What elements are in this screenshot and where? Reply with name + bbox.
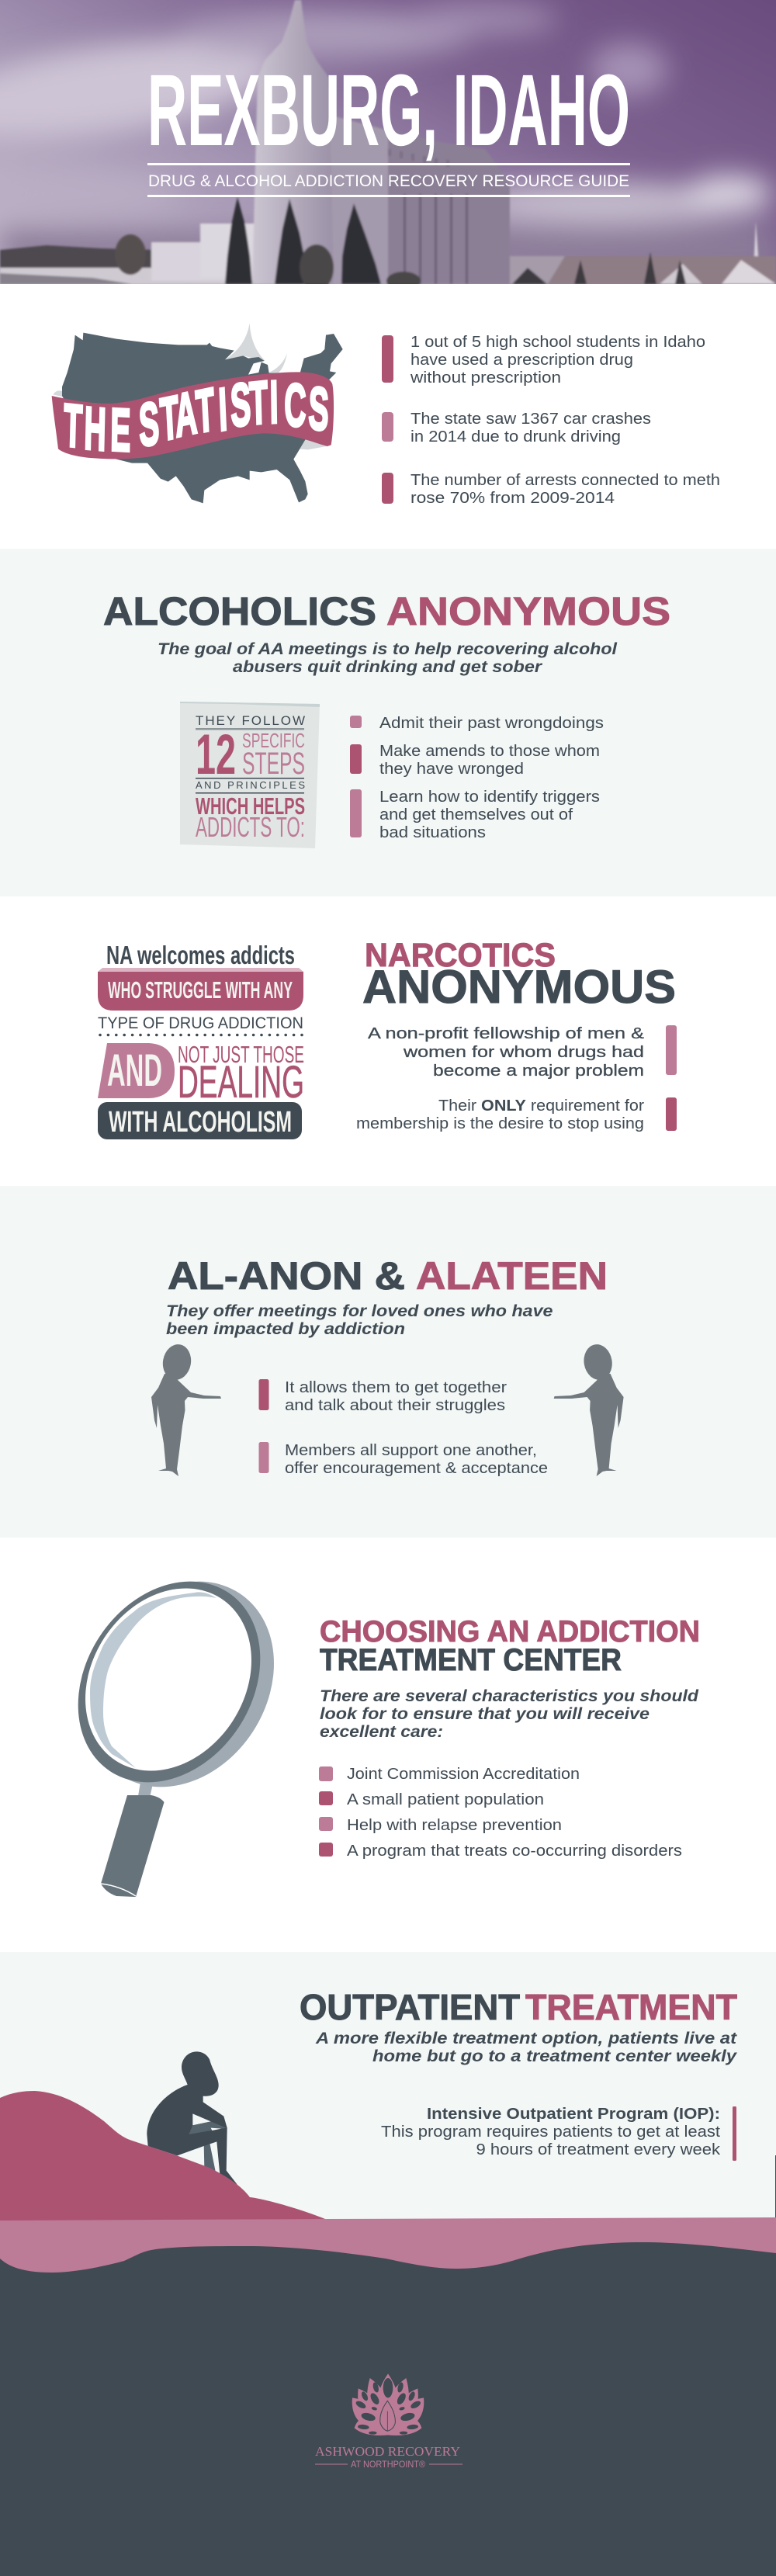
header photo: temple under purple sky	[0, 0, 776, 291]
heading	[362, 937, 676, 1013]
card: 12 steps: WHICH HELPS	[196, 792, 305, 820]
card: 12 steps: ADDICTS TO:	[196, 811, 305, 843]
illustration: seated figure on hill	[0, 2051, 329, 2221]
intro text: look for to ensure that you will receive	[320, 1705, 650, 1723]
text block: requirement	[356, 1097, 677, 1132]
heading	[320, 1615, 700, 1677]
list item 2: they have wronged	[379, 761, 524, 778]
callout: IOP: 9 hours of treatment every week	[476, 2141, 721, 2158]
text block: fellowship: become a major problem	[433, 1063, 644, 1080]
text block: fellowship: women for whom drugs had	[403, 1044, 644, 1061]
card: 12 steps: SPECIFIC	[242, 729, 305, 752]
panel: alcoholics anonymous	[0, 549, 776, 896]
banner text: THE STATISTICS	[63, 369, 330, 465]
card: 12 steps: AND PRINCIPLES	[196, 779, 305, 791]
intro text: The goal of AA meetings is to help recovering alcohol	[158, 640, 618, 658]
stat 1: 1 out of 5 high school students in Idaho	[411, 334, 705, 351]
heading: TREATMENT	[525, 1987, 737, 2027]
heading: ANONYMOUS	[386, 589, 670, 633]
card: 12 steps: STEPS	[242, 747, 305, 781]
heading: ALATEEN	[416, 1254, 608, 1298]
checklist: A program that treats co-occurring disorders	[347, 1843, 682, 1860]
intro text: been impacted by addiction	[166, 1320, 405, 1338]
card: 12 steps: THEY FOLLOW	[196, 713, 305, 728]
text block: fellowship: A non-profit fellowship of men &	[368, 1025, 645, 1042]
typographic block: NA welcomes addicts: NA welcomes addicts	[106, 941, 295, 969]
list item 1	[259, 1379, 507, 1414]
stat 2: The state saw 1367 car crashes	[411, 411, 651, 428]
icon: left figure	[151, 1342, 221, 1476]
stat 3	[382, 472, 720, 507]
text block: requirement: membership is the desire to stop using	[356, 1115, 644, 1132]
heading: OUTPATIENT	[300, 1987, 520, 2027]
intro text	[320, 1687, 699, 1741]
typographic block: NA welcomes addicts	[98, 941, 304, 1139]
panel: the statistics	[52, 324, 720, 507]
heading: ANONYMOUS	[362, 961, 676, 1013]
stat 2: in 2014 due to drunk driving	[411, 428, 621, 446]
panel: footer waves	[0, 2217, 776, 2576]
intro text	[166, 1302, 553, 1338]
intro text: They offer meetings for loved ones who have	[166, 1302, 553, 1320]
list item 2: offer encouragement & acceptance	[285, 1460, 548, 1477]
checklist: A small patient population	[347, 1791, 544, 1808]
logo: Ashwood Recovery: ASHWOOD RECOVERY	[315, 2444, 460, 2459]
icon: US map with banner	[52, 324, 343, 503]
text block: requirement: Their ONLY requirement for	[438, 1097, 644, 1115]
card: 12 steps: 12	[196, 723, 236, 786]
list item 1: Admit their past wrongdoings	[379, 715, 604, 732]
panel: narcotics anonymous	[98, 937, 677, 1139]
stat 3: The number of arrests connected to meth	[411, 472, 720, 489]
callout: IOP	[381, 2106, 736, 2161]
logo: Ashwood Recovery	[315, 2373, 462, 2470]
list item 3: bad situations	[379, 824, 486, 841]
heading: TREATMENT CENTER	[320, 1643, 622, 1677]
stat 2	[382, 411, 651, 446]
list item 1: and talk about their struggles	[285, 1397, 505, 1414]
card: 12 steps	[180, 702, 320, 848]
icon: magnifying glass	[41, 1546, 312, 1897]
typographic block: NA welcomes addicts: AND	[107, 1045, 162, 1096]
subtitle: DRUG & ALCOHOL ADDICTION RECOVERY RESOURCE GUIDE	[148, 172, 629, 190]
heading	[300, 1987, 737, 2027]
panel: header	[0, 0, 776, 291]
intro text	[315, 2030, 737, 2065]
typographic block: NA welcomes addicts: DEALING	[178, 1057, 304, 1108]
intro text: A more flexible treatment option, patients live at	[315, 2030, 737, 2047]
list item 3: Learn how to identify triggers	[379, 789, 600, 806]
list item 2: Make amends to those whom	[379, 743, 600, 760]
intro text: abusers quit drinking and get sober	[233, 658, 543, 676]
intro text: home but go to a treatment center weekly	[372, 2047, 737, 2065]
stat 1: have used a prescription drug	[411, 352, 633, 369]
heading: CHOOSING AN ADDICTION	[320, 1615, 700, 1649]
checklist: Help with relapse prevention	[347, 1817, 562, 1834]
typographic block: NA welcomes addicts: WITH ALCOHOLISM	[109, 1106, 292, 1139]
list item 2	[350, 743, 600, 778]
intro text: excellent care:	[320, 1723, 443, 1741]
typographic block: NA welcomes addicts: WHO STRUGGLE WITH ANY	[108, 976, 293, 1004]
heading	[168, 1254, 608, 1298]
stat 3: rose 70% from 2009-2014	[411, 490, 615, 507]
list item 1: It allows them to get together	[285, 1379, 507, 1396]
heading: ALCOHOLICS	[103, 589, 376, 633]
list item 3: and get themselves out of	[379, 806, 573, 823]
stat 1	[382, 334, 705, 387]
checklist	[319, 1766, 682, 1860]
heading: AL-ANON &	[168, 1254, 405, 1298]
panel: outpatient treatment	[0, 1952, 776, 2221]
typographic block: NA welcomes addicts: TYPE OF DRUG ADDICTION	[98, 1014, 303, 1032]
list item 3	[350, 789, 600, 841]
heading	[103, 589, 670, 633]
panel: al-anon and alateen	[0, 1186, 776, 1538]
stat 1: without prescription	[410, 369, 561, 387]
logo: Ashwood Recovery: AT NORTHPOINT®	[351, 2459, 425, 2470]
list item 2: Members all support one another,	[285, 1442, 537, 1459]
checklist: Joint Commission Accreditation	[347, 1766, 580, 1783]
typographic block: NA welcomes addicts: NOT JUST THOSE	[178, 1041, 304, 1068]
icon: right figure	[554, 1342, 624, 1476]
intro text: There are several characteristics you should	[320, 1687, 699, 1705]
text block: fellowship	[368, 1025, 677, 1080]
callout: IOP: Intensive Outpatient Program (IOP):	[427, 2106, 720, 2123]
intro text	[158, 640, 618, 676]
heading: NARCOTICS	[365, 937, 556, 974]
callout: IOP: This program requires patients to get at least	[381, 2124, 720, 2141]
list item 2	[259, 1442, 548, 1477]
panel: choosing a treatment center	[41, 1546, 700, 1897]
